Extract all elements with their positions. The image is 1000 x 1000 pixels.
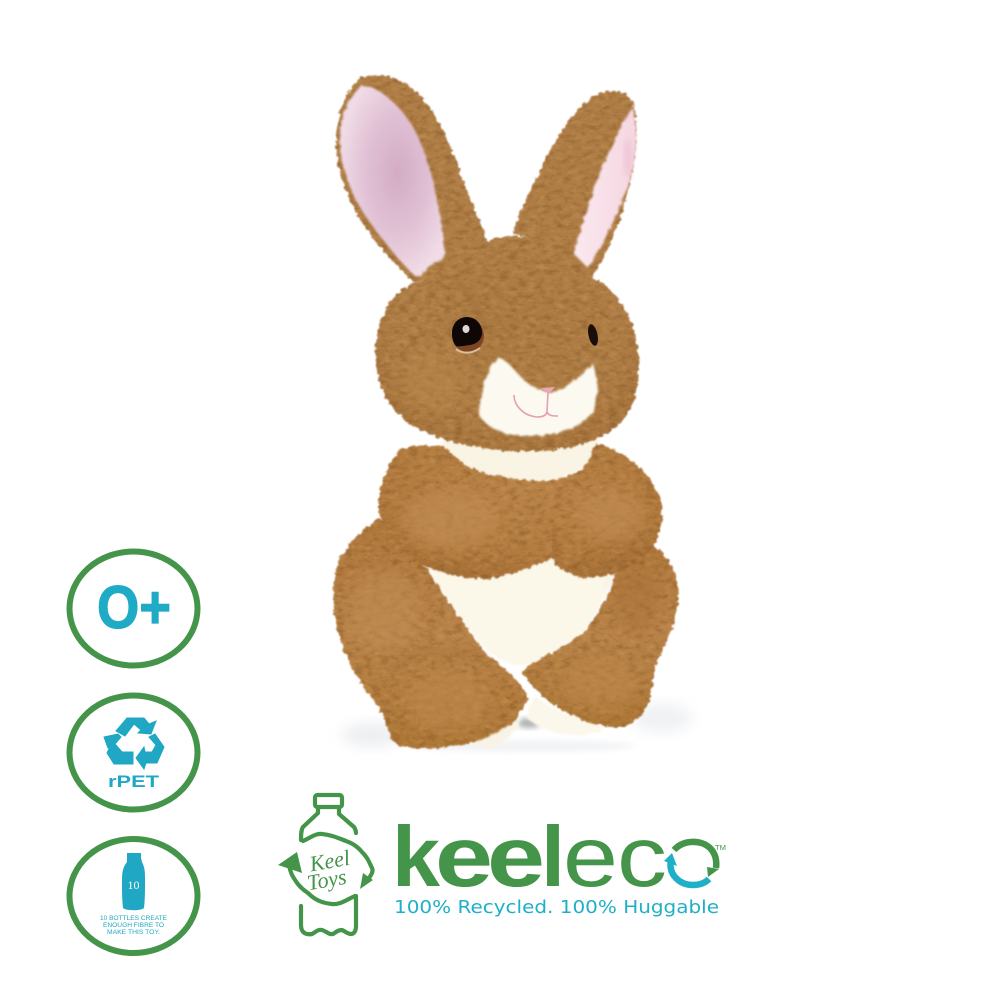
mouth stitching [514, 392, 558, 417]
badge: 10 bottles [70, 839, 198, 953]
icon: bottle [122, 853, 145, 910]
logo: keeleco wordmark: TM [715, 845, 726, 852]
right arrowhead [360, 873, 373, 889]
left ear [336, 75, 487, 283]
plush rabbit toy [333, 75, 678, 748]
logo: keeleco wordmark: l [541, 810, 565, 905]
caption: ENOUGH FIBRE TO [103, 923, 164, 929]
right eye [586, 323, 600, 347]
logo: keeleco wordmark: e [487, 810, 545, 905]
logo: recycled bottle [278, 795, 373, 934]
logo tagline: 100% Recycled. 100% Huggable [394, 897, 719, 918]
head [376, 236, 639, 451]
logo keel toys wordmark: Toys [305, 864, 348, 895]
caption: MAKE THIS TOY. [107, 930, 160, 936]
caption: 10 BOTTLES CREATE [100, 916, 167, 922]
left inner ear [340, 86, 445, 278]
folded arms [379, 444, 662, 579]
right leg [522, 545, 678, 727]
logo: keeleco wordmark: k [392, 810, 441, 905]
right inner ear [574, 107, 636, 268]
logo keel toys wordmark [305, 845, 352, 895]
badge: rPET: rPET [108, 772, 160, 791]
left eye [452, 317, 484, 353]
right toe white [526, 696, 604, 735]
chest white [440, 440, 600, 482]
logo: keeleco wordmark: c [617, 810, 667, 905]
left foot toe white [470, 716, 522, 748]
badge: 10 bottles: 10 [128, 878, 140, 892]
left leg [333, 518, 527, 748]
badge: age 0+ [70, 552, 198, 666]
caption [100, 916, 167, 936]
logo keel toys wordmark: Keel [307, 845, 352, 877]
left arrowhead [278, 852, 302, 873]
logo: keeleco wordmark [392, 810, 726, 905]
icon: recycling o [671, 842, 716, 885]
logo: keeleco wordmark: e [563, 810, 618, 905]
floor shadow [342, 704, 692, 752]
muzzle [479, 357, 597, 436]
logo: keeleco wordmark: e [435, 810, 493, 905]
icon: recycle arrows [104, 718, 164, 769]
right ear [513, 91, 636, 279]
badge: age 0+: O+ [97, 574, 171, 641]
belly [425, 555, 615, 665]
nose [541, 387, 555, 394]
badge: rPET [70, 696, 198, 810]
